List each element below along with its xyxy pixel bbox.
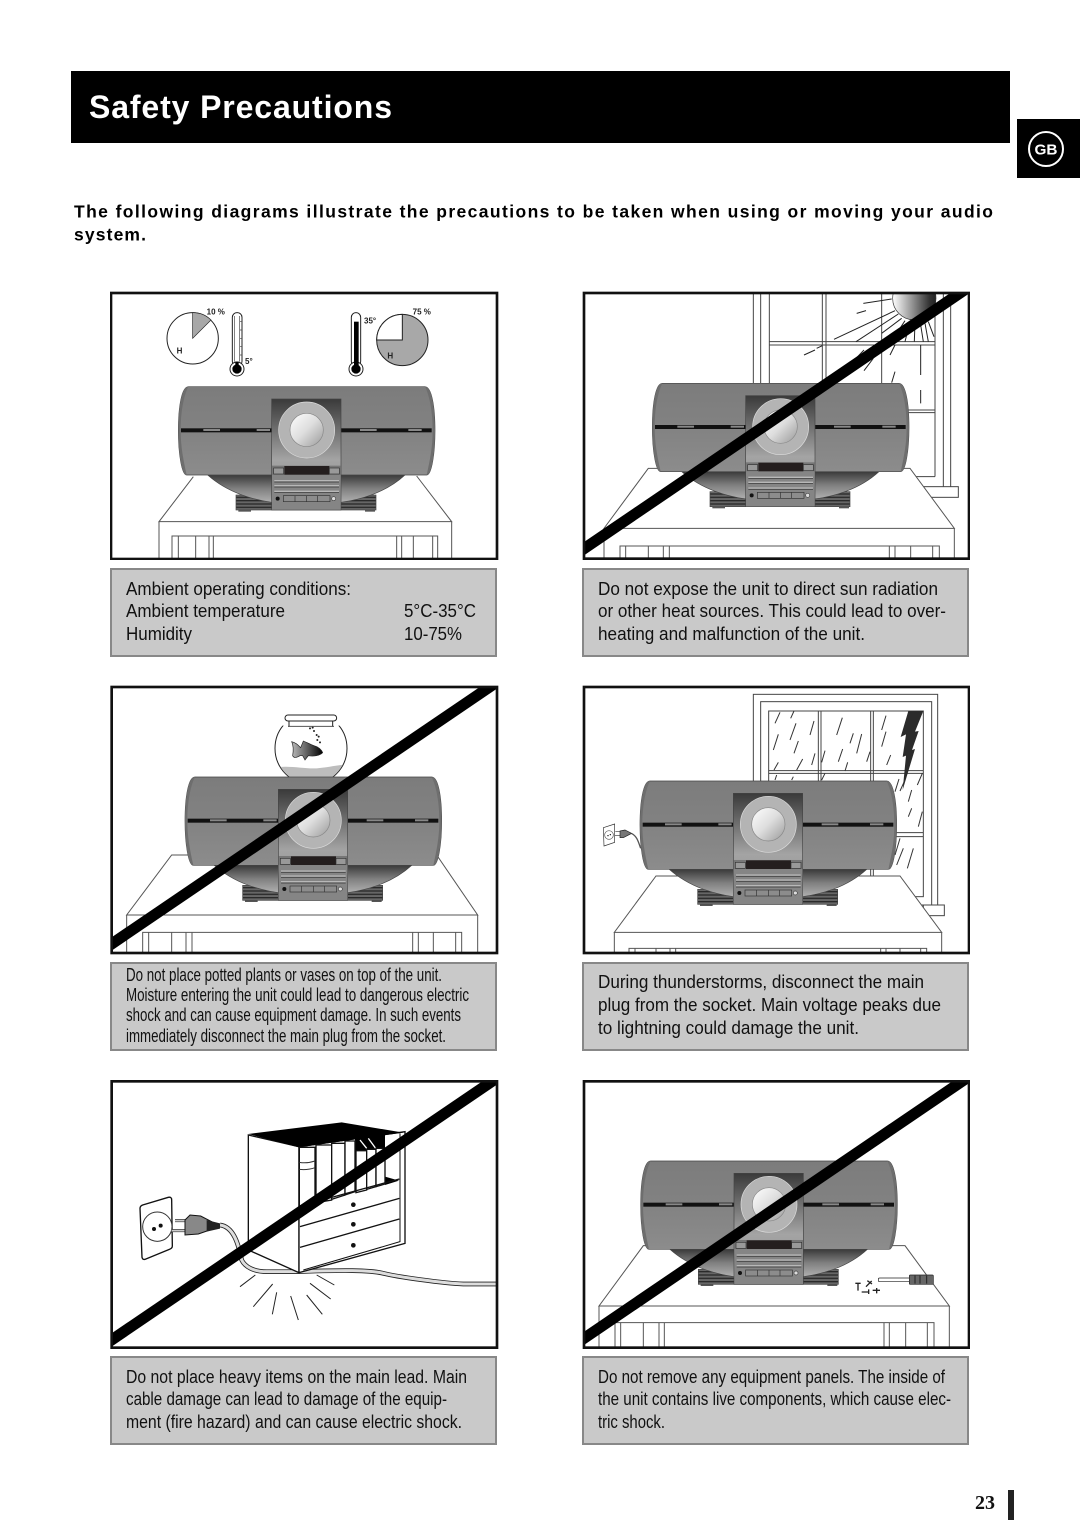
window <box>753 290 958 497</box>
caption: main lead: cable damage can lead to damage of the equip- <box>126 1389 447 1409</box>
stereo unit <box>178 387 435 512</box>
panel frame <box>112 687 497 953</box>
thermometer 5 degrees: 5° <box>245 357 253 366</box>
caption: ambient conditions: Ambient temperature <box>126 601 285 621</box>
thermometer 5 degrees <box>230 313 253 376</box>
prohibition slash <box>107 1074 503 1343</box>
prohibition slash <box>107 678 503 947</box>
caption: ambient conditions <box>110 568 497 657</box>
rain <box>773 711 922 868</box>
thermometer 35 degrees <box>349 313 376 376</box>
wall socket and plug <box>603 824 641 848</box>
thermometer 35 degrees: 35° <box>364 316 376 325</box>
table <box>599 1246 949 1306</box>
caption: ambient conditions: Humidity <box>126 624 192 644</box>
panel: removing panels illustration <box>582 1080 970 1349</box>
wall socket <box>140 1197 172 1259</box>
panel: heavy items on lead illustration <box>110 1080 498 1349</box>
sun <box>892 294 936 320</box>
page number: 23 <box>975 1492 995 1514</box>
caption: direct sun: heating and malfunction of the unit. <box>598 624 865 644</box>
caption: ambient conditions: 5°C-35°C <box>404 601 476 621</box>
humidity pie 10%: H <box>177 347 183 356</box>
title banner: Safety Precautions <box>89 89 392 125</box>
caption: main lead: ment (fire hazard) and can cause electric shock. <box>126 1412 462 1432</box>
humidity pie 75%: H <box>387 352 393 361</box>
intro text: system. <box>74 224 146 244</box>
language tab: GB: GB <box>1034 142 1058 158</box>
screwdriver and screws <box>855 1275 933 1294</box>
humidity pie 10%: 10 % <box>207 308 225 317</box>
panel frame <box>584 293 969 559</box>
caption: direct sun <box>582 568 969 657</box>
panel frame <box>584 687 969 953</box>
stereo unit <box>185 777 442 902</box>
intro text: The following diagrams illustrate the precautions to be taken when using or moving your audio <box>74 202 993 222</box>
stereo unit <box>652 383 909 508</box>
panel frame <box>584 1081 969 1348</box>
intro text <box>74 202 993 244</box>
fishbowl <box>274 714 348 777</box>
panel frame <box>112 1081 497 1348</box>
prohibition slash <box>577 1074 973 1343</box>
panel: ambient conditions illustration <box>110 292 498 560</box>
panel: direct sun illustration <box>582 292 970 560</box>
table <box>159 476 452 560</box>
stereo unit <box>640 781 897 906</box>
caption: thunderstorms: During thunderstorms, disconnect the main <box>598 972 924 992</box>
caption: equipment panels: tric shock. <box>598 1412 665 1432</box>
caption: ambient conditions: 10-75% <box>404 624 462 644</box>
panel: fishbowl on unit illustration <box>110 686 498 954</box>
books <box>299 1141 385 1206</box>
page number <box>975 1490 1014 1520</box>
caption: main lead <box>110 1356 497 1445</box>
caption: vases and moisture <box>110 962 497 1051</box>
fish <box>292 741 323 760</box>
panel: thunderstorm illustration <box>582 686 970 954</box>
caption: equipment panels <box>582 1356 969 1445</box>
bookcase <box>248 1122 405 1273</box>
power cord <box>220 1225 500 1284</box>
plug <box>172 1215 220 1235</box>
lightning <box>901 711 923 790</box>
impact marks <box>240 1275 334 1320</box>
caption: thunderstorms: plug from the socket. Main voltage peaks due <box>598 995 941 1015</box>
table <box>127 855 478 915</box>
table <box>604 468 954 528</box>
language tab: GB <box>1017 119 1080 178</box>
caption: direct sun: or other heat sources. This could lead to over- <box>598 601 946 621</box>
table <box>614 876 942 932</box>
title banner <box>71 71 1010 143</box>
caption: direct sun: Do not expose the unit to direct sun radiation <box>598 579 938 599</box>
drawers <box>300 1179 399 1247</box>
sun rays <box>804 299 934 403</box>
humidity pie 75% <box>377 307 431 366</box>
humidity pie 75%: 75 % <box>413 307 431 316</box>
window <box>753 694 944 916</box>
humidity pie 10% <box>167 308 225 364</box>
caption: ambient conditions: Ambient operating conditions: <box>126 579 351 599</box>
prohibition slash <box>577 284 973 554</box>
panel frame <box>111 293 497 559</box>
caption: thunderstorms: to lightning could damage the unit. <box>598 1018 859 1038</box>
stereo unit <box>641 1161 897 1286</box>
caption: thunderstorms <box>582 962 969 1051</box>
